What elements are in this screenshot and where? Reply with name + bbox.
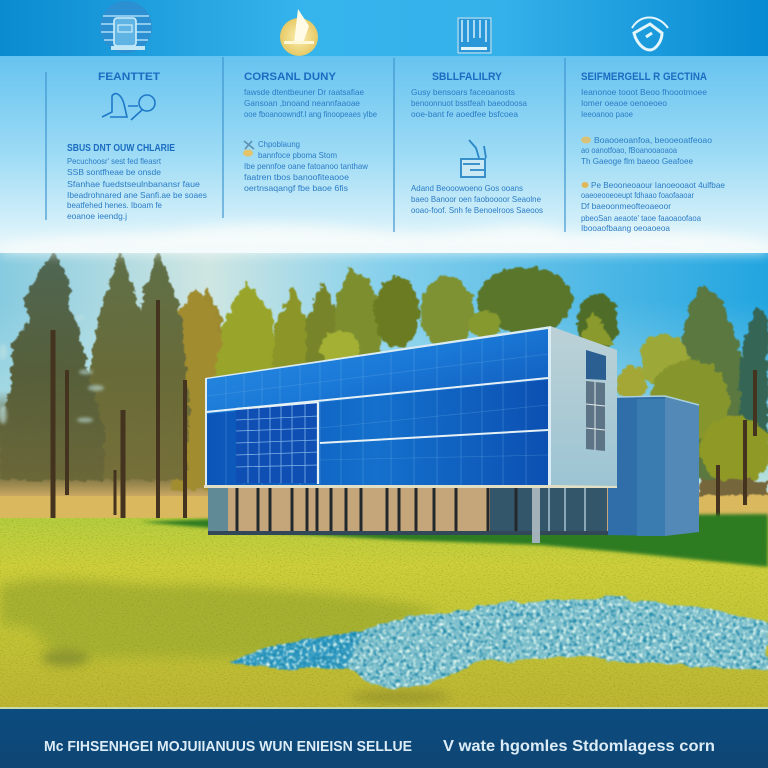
panel: column 1 xyxy=(67,71,207,221)
distant field xyxy=(0,492,768,522)
body text: eoanoe ieendg.j xyxy=(67,211,127,221)
list text two: Pe Beooneoaour Ianoeooaot 4ulfbae xyxy=(591,180,725,190)
body text: Ieanonoe tooot Beoo fhoootmoee xyxy=(581,87,707,97)
list text two: Df baeoonmeofteoaeoor xyxy=(581,201,671,211)
body text xyxy=(411,87,527,119)
list text: oertnsaqangf fbe baoe 6fis xyxy=(244,183,348,193)
heading: CORSANL DUNY xyxy=(244,71,337,83)
icon: eye xyxy=(632,18,668,50)
heading: SEIFMERGELL R GECTINA xyxy=(581,71,707,83)
icon: panel frame xyxy=(457,17,492,54)
list text two xyxy=(581,180,725,233)
facade panel grid xyxy=(226,333,526,485)
solar facade xyxy=(205,326,551,488)
body text: ooe-bant fe aoedfee bsfcoea xyxy=(411,109,518,119)
panel: column 3 xyxy=(411,71,543,215)
body text xyxy=(67,156,207,221)
list text xyxy=(244,139,369,193)
icon: hand bullet xyxy=(581,136,591,144)
lower text xyxy=(411,183,543,215)
column dividers xyxy=(46,57,565,232)
list text one: Boaooeoanfoa, beooeoatfeoao xyxy=(594,135,712,145)
inset solar panel xyxy=(236,402,318,484)
top colour band xyxy=(0,0,768,56)
ground floor glazing xyxy=(208,488,608,535)
left tree trunks xyxy=(53,300,185,518)
landscape background: sky xyxy=(0,252,768,502)
building shadow on grass xyxy=(140,514,768,567)
trees on the left xyxy=(0,250,222,490)
body text xyxy=(244,87,377,119)
facade white rails xyxy=(206,378,548,443)
list text one: Th Gaeoge flm baeoo Geafoee xyxy=(581,156,693,166)
icon: note bullet xyxy=(582,182,588,188)
body text xyxy=(581,87,707,119)
body text: Ibeadrohnared ane Sanfi.ae be soaes xyxy=(67,190,207,200)
trees on the right xyxy=(617,283,768,495)
body text: Sfanhae fuedstseulnbanansr faue xyxy=(67,179,200,189)
body text: ooe fboanoowndf.l ang finoopeaes ylbe xyxy=(244,109,377,119)
panel: column 2 xyxy=(243,71,377,193)
building xyxy=(204,326,699,543)
icon: gold droplet xyxy=(280,9,318,56)
footer band xyxy=(0,708,768,768)
trees behind the building xyxy=(190,267,619,400)
footer text left: Mc FIHSENHGEI MOJUIIANUUS WUN ENIEISN SELLUE xyxy=(44,738,412,755)
footer rule xyxy=(0,707,768,709)
body text: SSB sontfheae be onsde xyxy=(67,167,161,177)
lower text: baeo Banoor oen faoboooor Seaolne xyxy=(411,194,541,204)
body text: Ieeoanoo paoe xyxy=(581,109,633,119)
cloud band xyxy=(0,224,768,253)
list text two: Ibooaofbaang oeoaoeoa xyxy=(581,223,670,233)
icon: clipboard xyxy=(461,140,486,177)
flower field xyxy=(230,599,768,688)
icon: tools xyxy=(243,141,254,156)
list text: bannfoce pboma Stom xyxy=(258,150,337,160)
right tree trunks xyxy=(718,370,755,518)
list text two: pbeoSan aeaote' taoe faaoaoofaoa xyxy=(581,213,701,223)
dark grass under flowers xyxy=(350,690,450,704)
list text two: oaeoeooeoeupt fdhaao foaofaaoar xyxy=(581,190,694,200)
icon: building badge xyxy=(100,1,152,53)
list text: Chpoblaung xyxy=(258,139,300,149)
body text: Pecuchoosr' sest fed fleasrt xyxy=(67,156,162,166)
panel: column 4 xyxy=(581,71,725,233)
heading: FEANTTET xyxy=(98,71,160,83)
body text: Gansoan ,bnoand neannfaaoae xyxy=(244,98,360,108)
list text: faatren tbos banoofiteaooe xyxy=(244,172,349,182)
grass grain xyxy=(0,518,768,708)
annex block xyxy=(607,396,699,536)
list text one xyxy=(581,135,712,166)
background haze of forest, left xyxy=(0,390,215,496)
grass meadow xyxy=(0,518,768,710)
upper side wall xyxy=(550,326,617,488)
body text: benoonnuot bsstfeah baeodoosa xyxy=(411,98,527,108)
lower text: Adand Beooowoeno Gos ooans xyxy=(411,183,523,193)
body text: fawsde dtentbeuner Dr raatsafiae xyxy=(244,87,364,97)
heading: SBLLFALILRY xyxy=(432,71,503,83)
support column xyxy=(532,488,540,543)
body text: Gusy bensoars faceoanosts xyxy=(411,87,515,97)
icon: figure and magnifier xyxy=(102,94,155,120)
textured meadow patch xyxy=(0,579,440,660)
body text: Iomer oeaoe oenoeoeo xyxy=(581,98,667,108)
dark grass tuft xyxy=(41,650,89,666)
subheading: SBUS DNT OUW CHLARIE xyxy=(67,143,175,154)
list text one: ao oanotfoao, fBoanooaoaoa xyxy=(581,145,677,155)
side wall window xyxy=(586,350,606,451)
sky gaps in the left trees xyxy=(0,316,104,424)
floor slab xyxy=(204,485,617,488)
top panel background xyxy=(0,56,768,253)
lower text: ooao-foof. Snh fe Benoelroos Saeoos xyxy=(411,205,543,215)
horizon glow xyxy=(0,300,768,500)
list text: Ibe pennfoe oane fatoanoo tanthaw xyxy=(244,161,369,171)
footer text right: V wate hgomles Stdomlagess corn xyxy=(443,738,715,755)
body text: beatfehed henes. Iboam fe xyxy=(67,200,162,210)
